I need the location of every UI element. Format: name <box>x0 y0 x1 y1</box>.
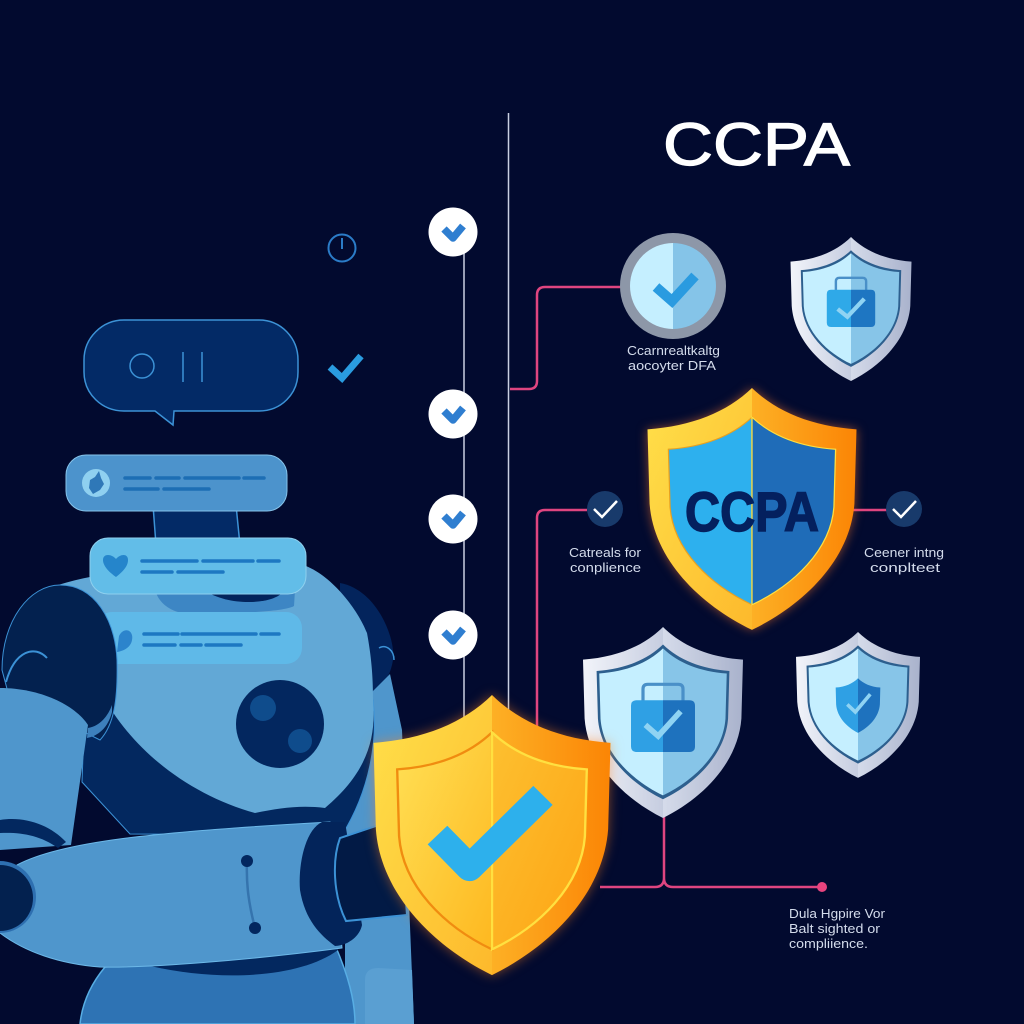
robot forearm joint <box>0 861 36 933</box>
robot cuff <box>300 822 362 946</box>
shield: silver with briefcase top right <box>790 237 912 381</box>
robot chest smile <box>204 590 284 602</box>
caption: data note: Balt sighted or <box>789 922 880 936</box>
caption: left badge: Catreals for <box>569 545 642 560</box>
title: CCPA <box>663 111 850 178</box>
small shield icon <box>836 678 880 733</box>
caption: circle badge: Ccarnrealtkaltg <box>627 343 720 358</box>
briefcase icon <box>827 278 875 327</box>
connector end dot <box>817 882 827 892</box>
timeline vertical lines <box>464 113 508 740</box>
chat card top <box>66 455 287 511</box>
pink connector lines <box>510 287 887 887</box>
robot right side strut <box>345 674 414 1024</box>
caption: left badge <box>569 545 642 575</box>
chat card middle <box>90 538 306 594</box>
badge: circle check <box>620 233 726 339</box>
chat card bottom <box>96 612 302 664</box>
shield: silver with small shield lower right <box>796 632 920 778</box>
node 3 <box>428 494 478 544</box>
robot neck <box>153 505 240 545</box>
node 2 <box>428 390 478 438</box>
caption: data note: compliience. <box>789 937 868 951</box>
node 4 <box>428 610 478 660</box>
caption: left badge: conplience <box>570 560 641 575</box>
robot body <box>58 566 374 813</box>
robot elbow band <box>0 819 66 848</box>
check mark on shield <box>437 795 543 868</box>
check badge left <box>587 491 623 527</box>
shield: silver with lock lower left <box>583 627 743 818</box>
robot chest crescent <box>155 590 295 613</box>
robot forearm crescent <box>150 935 338 975</box>
robot forearm <box>0 822 342 967</box>
shield: gold CCPA centre <box>648 388 856 630</box>
caption: right badge: Ceener intng <box>864 545 944 560</box>
robot lower torso <box>82 700 374 835</box>
timeline check nodes <box>428 208 478 660</box>
caption: data note <box>789 907 885 951</box>
shield label CCPA: CCPA <box>685 480 819 543</box>
icon: clock <box>328 234 356 262</box>
icon: check mark near bubble <box>330 356 361 378</box>
caption: right badge <box>864 545 944 575</box>
shield: gold check foreground <box>374 695 610 975</box>
caption: circle badge: aocoyter DFA <box>628 358 716 373</box>
robot chest port <box>236 680 324 768</box>
robot shoulder <box>2 585 117 740</box>
check badge right <box>886 491 922 527</box>
lock icon <box>631 684 695 752</box>
caption: data note: Dula Hgpire Vor <box>789 907 885 921</box>
robot wrist <box>335 818 407 921</box>
robot hip <box>80 945 355 1024</box>
robot far arm <box>340 583 394 700</box>
speech bubble <box>84 320 298 425</box>
robot figure <box>0 505 414 1024</box>
robot forearm seam <box>241 855 261 934</box>
node 1 <box>428 208 478 256</box>
robot upper arm <box>0 688 88 850</box>
caption: right badge: conplteet <box>870 560 941 575</box>
caption: circle badge <box>627 343 720 373</box>
